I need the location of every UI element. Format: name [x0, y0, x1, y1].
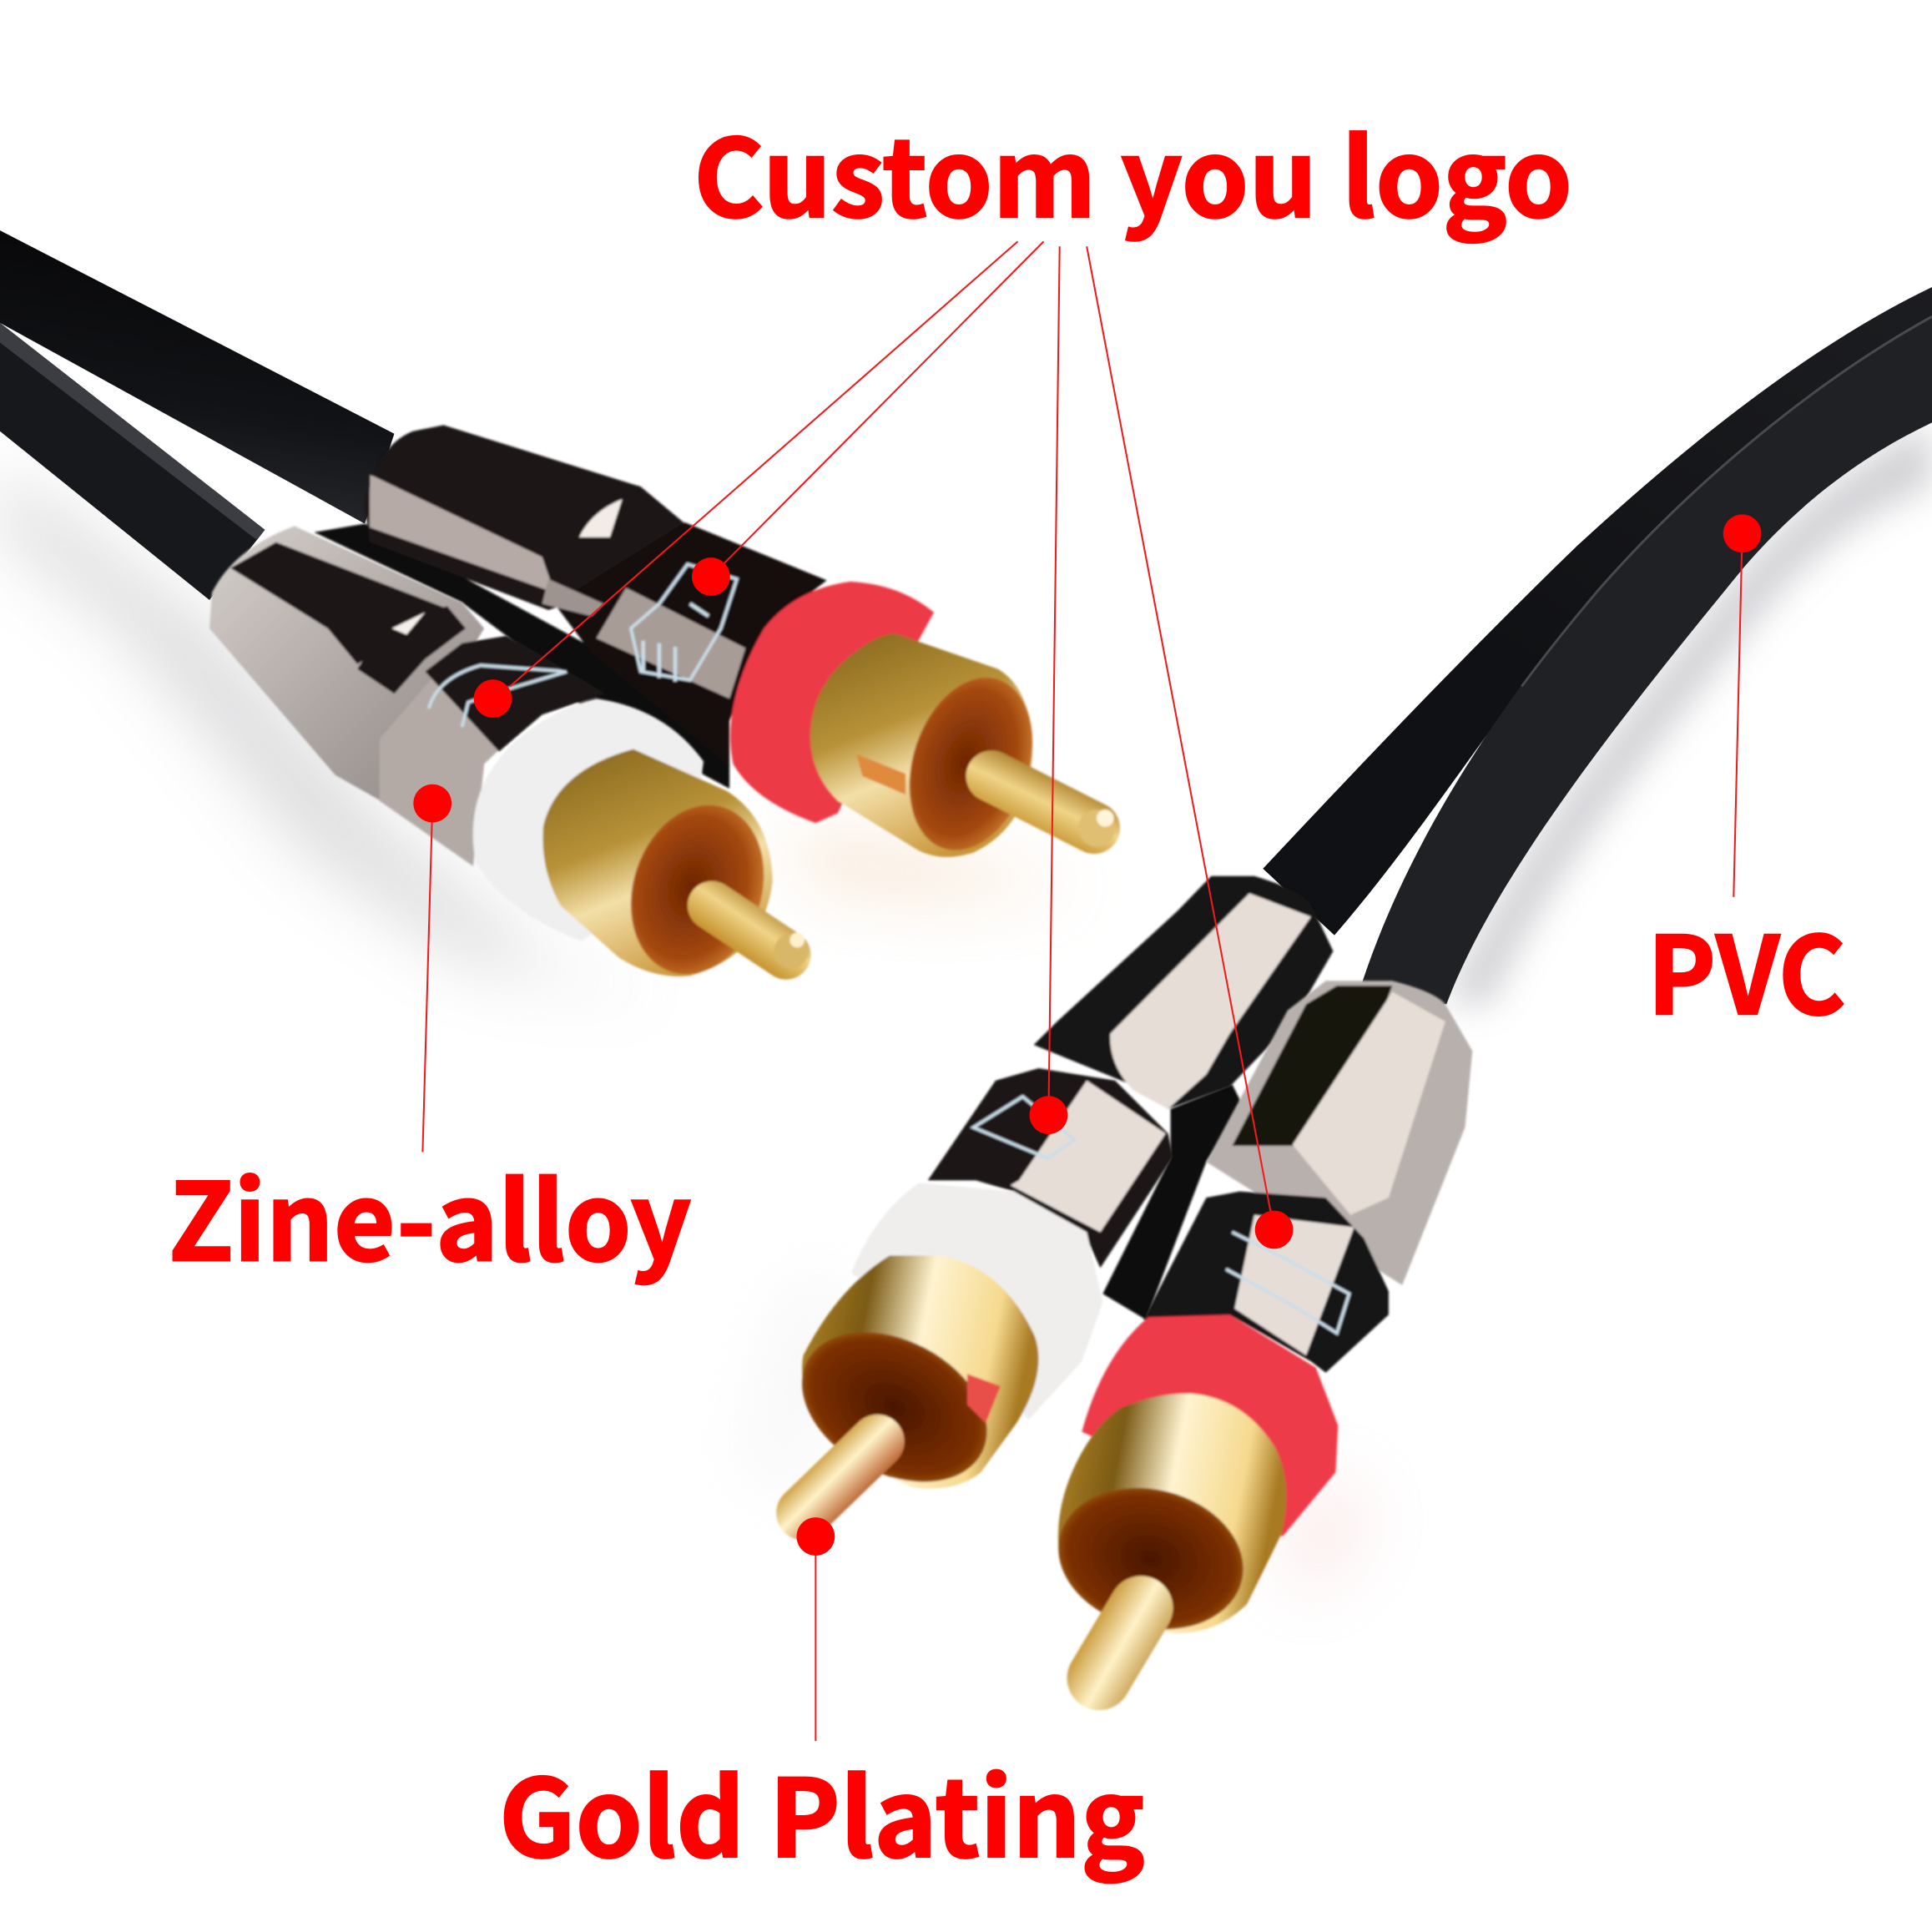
right red plug	[1043, 981, 1472, 1678]
dark underside between the plugs	[314, 523, 729, 789]
left cables	[0, 230, 394, 600]
socket interior	[610, 788, 785, 991]
collar with logo	[1143, 1192, 1389, 1373]
heading: custom logo: Custom you logo	[694, 93, 1572, 248]
right cables	[1263, 287, 1932, 1004]
socket interior	[889, 662, 1053, 866]
socket interior	[1043, 1469, 1259, 1648]
barrel	[1206, 981, 1472, 1285]
label: gold plating: Gold Plating	[499, 1733, 1145, 1888]
red ring	[730, 582, 934, 823]
soft shadows under the plugs	[0, 468, 1368, 1602]
barrel	[365, 425, 685, 610]
left red plug	[314, 425, 1115, 866]
barrel	[209, 526, 484, 801]
label: zinc alloy: Zine-alloy	[169, 1136, 691, 1291]
left white plug	[209, 526, 809, 991]
centre pin	[1099, 1608, 1141, 1678]
centre pin	[804, 1441, 877, 1513]
red ring	[1082, 1314, 1338, 1536]
white ring	[473, 699, 704, 941]
gold shell	[1058, 1394, 1286, 1633]
gold shell	[810, 633, 1032, 857]
lower cable	[1355, 315, 1932, 1004]
centre pin	[712, 905, 809, 968]
socket interior	[776, 1302, 1013, 1512]
gold shell	[802, 1255, 1038, 1489]
gold shell	[542, 749, 773, 976]
collar with logo	[542, 522, 827, 766]
red reflection	[967, 1374, 1001, 1423]
white ring	[851, 1183, 1102, 1420]
barrel	[1034, 876, 1333, 1109]
upper cable	[1263, 287, 1932, 936]
label: PVC: PVC	[1647, 890, 1846, 1045]
black gap between the right plugs	[1102, 1084, 1244, 1319]
right white plug	[776, 876, 1333, 1513]
collar with logo	[928, 1068, 1173, 1268]
callout lines	[422, 241, 1743, 1741]
centre pin	[992, 776, 1115, 846]
collar with logo	[380, 636, 603, 866]
shadow under the right cables	[1446, 422, 1932, 1004]
callout dots	[413, 514, 1762, 1556]
